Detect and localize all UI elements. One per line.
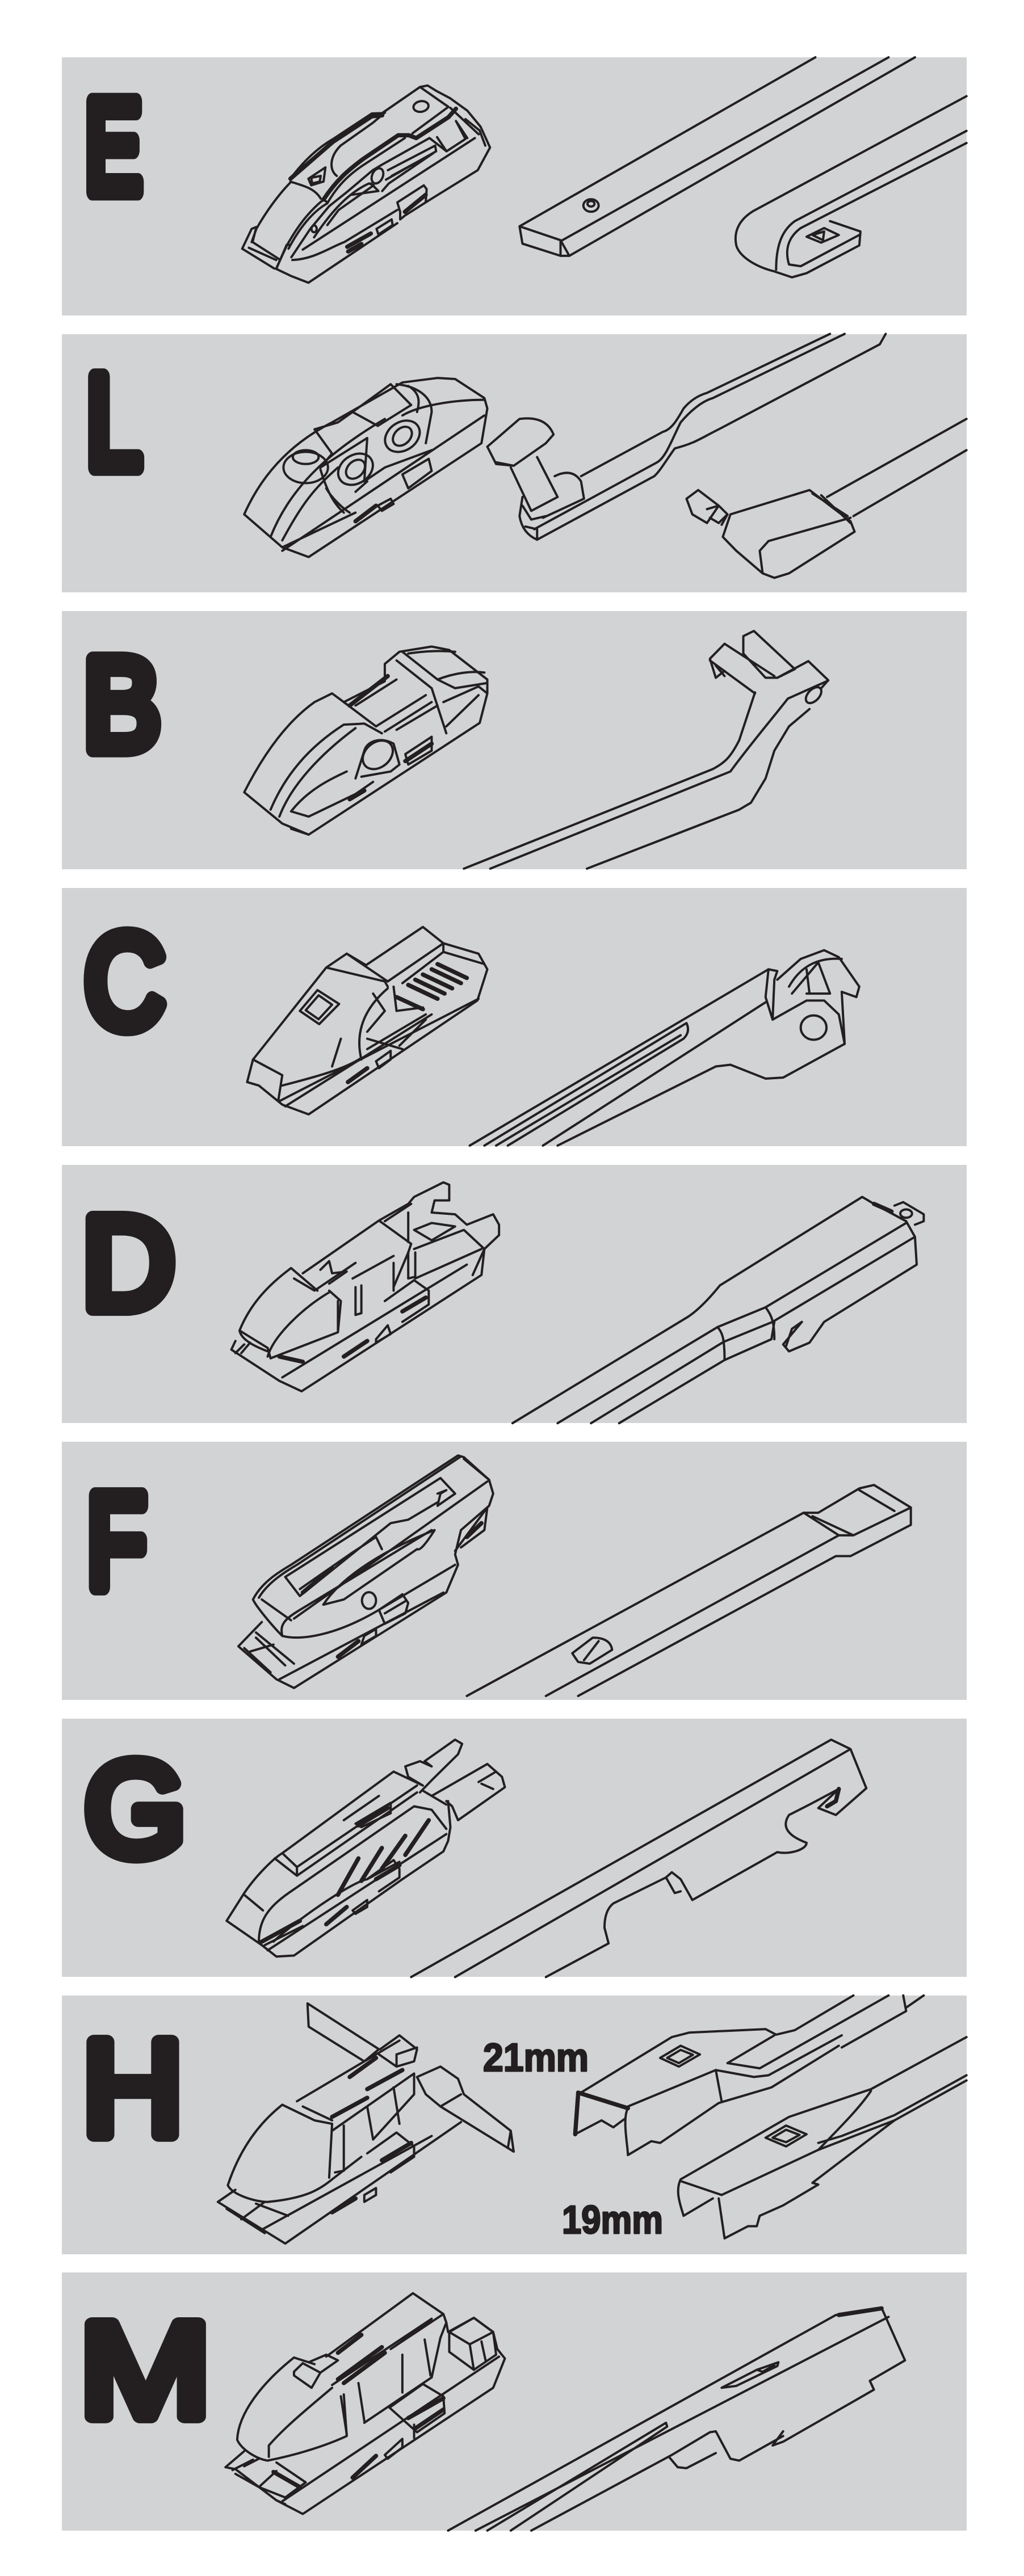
panel: adapter G (62, 1719, 967, 1977)
heading: letter E: E (85, 74, 142, 220)
illustration: blade clip L (244, 378, 488, 557)
heading: letter L: L (86, 348, 141, 496)
illustration: blade clip E (242, 86, 490, 283)
illustration: blade clip B (244, 647, 488, 835)
panel: adapter L (62, 334, 967, 592)
illustration: blade clip H (218, 2003, 514, 2244)
heading: letter F: F (87, 1467, 146, 1615)
panel: adapter H (62, 1996, 967, 2254)
panel: adapter C (62, 888, 967, 1146)
heading: letter B: B (83, 632, 161, 778)
illustration: blade clip G (226, 1740, 505, 1956)
heading: letter M: M (79, 2295, 211, 2445)
illustration: arm end F (467, 1485, 911, 1696)
illustration: arm end D (513, 1197, 924, 1423)
heading: letter G: G (85, 1735, 186, 1883)
illustration: blade clip D (232, 1182, 499, 1391)
illustration: T-bolt and stepped arm L (488, 334, 885, 540)
label: 19mm: 19mm (562, 2198, 663, 2242)
illustration: angled connector L (686, 419, 967, 578)
illustration: arm end E (519, 57, 967, 277)
illustration: arm end B (464, 631, 828, 869)
panel: adapter E (62, 57, 967, 315)
illustration: arm end C (470, 950, 859, 1146)
panel: adapter F (62, 1442, 967, 1700)
panel: adapter M (62, 2272, 967, 2531)
illustration: 19mm profile (678, 2037, 967, 2238)
panel: adapter B (62, 611, 967, 869)
illustration: arm end M (448, 2308, 905, 2531)
panel: adapter D (62, 1165, 967, 1423)
illustration: blade clip F (238, 1455, 493, 1688)
illustration: 21mm profile (575, 1996, 924, 2155)
heading: letter C: C (85, 907, 165, 1055)
illustration: blade clip C (247, 927, 488, 1114)
label: 21mm: 21mm (483, 2035, 589, 2080)
heading: letter D: D (82, 1190, 174, 1337)
illustration: blade clip M (225, 2293, 505, 2514)
heading: letter H: H (82, 2014, 183, 2163)
illustration: arm end G (411, 1740, 866, 1977)
